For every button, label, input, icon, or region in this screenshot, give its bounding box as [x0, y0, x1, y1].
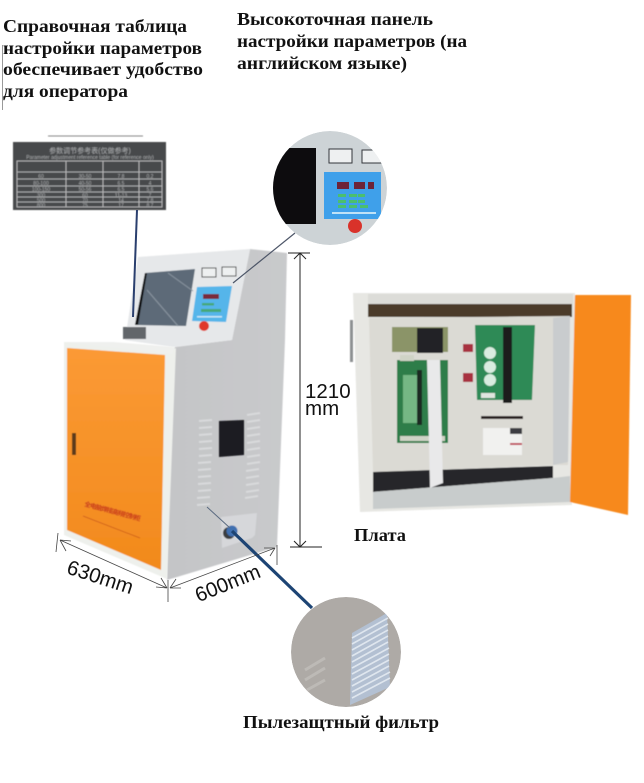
leader lines [133, 210, 312, 608]
console side [167, 249, 287, 580]
reference table plate: 4 [149, 181, 152, 187]
lower cabinet [64, 342, 260, 579]
depth dimension: 600mm [170, 545, 277, 607]
ribbon cable [427, 360, 443, 488]
reference table plate: 60 [82, 193, 88, 199]
dark cavity [373, 466, 553, 492]
breakers [481, 416, 523, 455]
caption: high precision panel: английском языке) [237, 53, 407, 74]
reference table plate: 300 [37, 193, 45, 199]
left upper board [392, 327, 448, 352]
reference table plate: 7.8 [118, 174, 125, 180]
reference table plate: 500 [37, 198, 45, 204]
console screen [135, 269, 195, 326]
zoom circle: dust filter [291, 597, 401, 707]
console front face [125, 249, 250, 347]
photo: circuit board interior [350, 293, 631, 515]
right green board [463, 325, 535, 403]
reference table plate: 7 [149, 193, 152, 199]
reference table plate: 17 [118, 203, 124, 209]
caption: parameter reference table: настройки параметров [3, 38, 202, 58]
reference table plate: 11-13 [115, 193, 127, 199]
caption: high precision panel: Высокоточная панель [237, 9, 434, 29]
reference table plate: 6.5 [118, 181, 125, 187]
label: board: Плата [354, 525, 406, 545]
label: dust filter: Пылезащтный фильтр [243, 712, 439, 732]
door handle [72, 433, 76, 455]
side latch [350, 320, 353, 362]
door label: 全电脑焊接高频控制柜 [83, 499, 142, 523]
width dimension: 630mm [56, 533, 168, 602]
reference table plate: 80-100 [33, 181, 49, 187]
back plate [369, 316, 570, 472]
emergency stop button [199, 321, 209, 331]
reference table plate: Parameter adjustment reference table (for reference only) [26, 155, 154, 161]
blue control panel [192, 286, 232, 322]
reference table plate: 70 [82, 198, 88, 204]
reference table plate: 75 [82, 203, 88, 209]
height dimension: 1210 mm [288, 253, 354, 547]
fan window [219, 420, 244, 457]
orange door open [570, 295, 631, 515]
reference table plate: 30-50 [79, 174, 92, 180]
reference table plate: 800 [37, 203, 45, 209]
reference table plate: 参数调节参考表(仅做参考) [49, 146, 131, 155]
caption: high precision panel: настройки параметров (на [237, 31, 467, 52]
reference table plate: 40-50 [79, 181, 92, 187]
reference table plate: 100-150 [32, 187, 50, 193]
reference table plate: 60 [38, 174, 44, 180]
orange door [67, 348, 165, 570]
height dimension: 1210 mm: mm [305, 397, 339, 420]
caption: parameter reference table [2, 16, 203, 110]
caption: parameter reference table: обеспечивает удобство [3, 59, 203, 79]
cabinet frame [353, 293, 575, 512]
door frame [64, 342, 176, 579]
width dimension: 630mm: 630mm [64, 556, 136, 599]
reference table plate: 50-56 [79, 187, 92, 193]
reference table plate: 8.7 [147, 203, 154, 209]
caption: high precision panel [237, 9, 467, 74]
left green board [397, 355, 448, 443]
reference table plate: 0.2 [147, 174, 154, 180]
reference table plate [13, 136, 166, 210]
vent slots [197, 413, 260, 505]
zoom circle: control panel [273, 131, 387, 245]
meters [202, 267, 236, 277]
reference table plate: 5.6 [147, 187, 154, 193]
small vent block [123, 327, 146, 339]
reference table plate: 6.5 [118, 187, 125, 193]
door label [83, 499, 142, 538]
connector recess [221, 513, 257, 548]
depth dimension: 600mm: 600mm [192, 560, 264, 607]
cabinet console [123, 249, 287, 580]
reference table plate: 7.8 [147, 198, 154, 204]
caption: parameter reference table: Справочная таблица [3, 16, 187, 36]
height dimension: 1210 mm: 1210 [305, 380, 351, 403]
reference table plate: 14 [118, 198, 124, 204]
caption: parameter reference table: для оператора [3, 81, 128, 101]
